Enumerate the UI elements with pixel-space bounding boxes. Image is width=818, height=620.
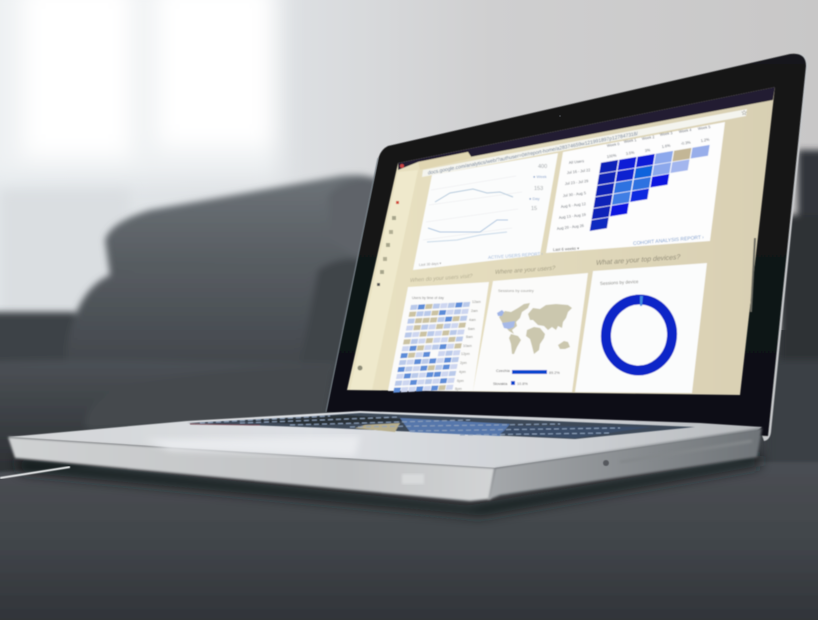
cohort heat grid xyxy=(590,145,710,231)
week headers: -0.3% xyxy=(681,140,692,146)
time of day labels: 12pm xyxy=(461,352,470,356)
background wall and window xyxy=(0,0,818,330)
card: sessions by country map: Sessions by country xyxy=(498,288,534,293)
time of day labels: 2am xyxy=(471,309,478,313)
cohort row labels: Aug 13 - Aug 19 xyxy=(559,213,586,220)
base front face xyxy=(8,437,495,501)
card: users by time of day heatmap: Users by time of day xyxy=(412,296,444,300)
country bar: Slovakia: Slovakia xyxy=(493,382,508,386)
country bar: Slovakia: 10.8% xyxy=(517,382,528,386)
cohort report link: Last 6 weeks ▾ xyxy=(553,246,579,252)
base right side face xyxy=(488,428,762,500)
line: monthly users xyxy=(435,189,513,202)
legend values: 153 xyxy=(534,186,543,192)
time of day labels: 6pm xyxy=(457,379,464,383)
week headers: Week 5 xyxy=(698,125,711,131)
heading: when do your users visit: When do your users visit? xyxy=(410,273,473,284)
week headers: Week 3 xyxy=(660,131,673,137)
card: sessions by device donut: Sessions by device xyxy=(600,279,639,286)
legend values: 15 xyxy=(531,206,537,212)
cohort row labels: All Users xyxy=(569,159,584,165)
power cable xyxy=(0,467,70,478)
donut chart xyxy=(601,295,677,375)
side vent xyxy=(620,441,752,462)
front label xyxy=(402,474,424,484)
base top surface xyxy=(8,411,762,468)
country bar: Slovakia xyxy=(493,381,528,386)
time of day labels: 10am xyxy=(463,344,472,348)
cohort row labels: Jul 30 - Aug 5 xyxy=(563,191,586,198)
sofa xyxy=(0,150,818,480)
cohort report link xyxy=(553,235,704,252)
cohort row labels: Aug 20 - Aug 26 xyxy=(557,224,584,231)
country bar: Czechia: 89.2% xyxy=(549,371,560,375)
heading: top devices: What are your top devices? xyxy=(596,254,680,267)
cohort row labels: Aug 6 - Aug 12 xyxy=(561,202,586,209)
week headers: Week 1 xyxy=(624,138,637,144)
laptop base xyxy=(8,411,762,501)
address bar: ☆ xyxy=(741,109,747,117)
week headers: Week 4 xyxy=(679,128,692,134)
card: sessions by device donut xyxy=(575,263,707,393)
report link: ACTIVE USERS REPORT › xyxy=(488,251,543,260)
cohort row labels: Jul 16 - Jul 22 xyxy=(567,168,591,175)
week headers xyxy=(607,125,711,159)
headphone jack xyxy=(603,460,609,466)
country bar: Czechia xyxy=(496,369,560,375)
laptop lid xyxy=(326,53,808,441)
address bar xyxy=(422,109,747,177)
legend values: ● Week xyxy=(533,174,547,179)
trackpad reflection xyxy=(145,436,360,456)
time of day labels: 8am xyxy=(466,335,473,339)
laptop shadow xyxy=(15,455,760,516)
legend values: 400 xyxy=(538,164,547,170)
card: cohort analysis table xyxy=(546,122,725,253)
time of day labels: 6am xyxy=(468,327,475,331)
time of day labels: 2pm xyxy=(460,361,467,365)
browser tab bar xyxy=(398,87,775,170)
time of day labels: 8pm xyxy=(455,387,462,391)
world map xyxy=(497,303,572,354)
screen xyxy=(347,87,775,395)
card: active users line chart xyxy=(413,153,558,270)
left lid edge xyxy=(326,158,378,412)
table surface xyxy=(0,462,818,620)
card: users by time of day heatmap xyxy=(388,282,489,393)
keyboard xyxy=(187,413,695,439)
week headers: 1.2% xyxy=(701,138,710,143)
week headers: 1.6% xyxy=(662,144,671,149)
cohort row labels: Jul 23 - Jul 29 xyxy=(565,179,589,186)
card: sessions by country map xyxy=(473,273,588,392)
time of day labels: 4am xyxy=(469,318,476,322)
heading: where are your users: Where are your users? xyxy=(495,266,556,276)
week headers: 3.5% xyxy=(626,151,635,156)
line: weekly users xyxy=(428,220,508,232)
card: active users line chart: Last 30 days ▾ xyxy=(419,261,441,267)
time of day labels xyxy=(455,300,481,391)
country bar: Czechia: Czechia xyxy=(496,369,511,373)
week headers: 3% xyxy=(645,148,651,153)
cohort row labels xyxy=(557,159,591,231)
webcam xyxy=(559,115,561,117)
week headers: Week 2 xyxy=(642,135,655,141)
time of day labels: 4pm xyxy=(459,370,466,374)
week headers: Week 0 xyxy=(607,142,620,148)
left sidebar xyxy=(350,170,418,390)
page scrollbar xyxy=(751,238,755,312)
address bar: docs.google.com/analytics/web/?authuser=0#/report-home/a28374659w121991897p127847318/ xyxy=(428,131,639,176)
cohort report link: COHORT ANALYSIS REPORT › xyxy=(633,235,704,247)
week headers: 100% xyxy=(607,153,617,159)
screen background xyxy=(347,87,775,395)
legend values: ● Day xyxy=(529,196,540,201)
line: daily users xyxy=(427,232,507,242)
legend values xyxy=(529,164,547,212)
heatmap grid xyxy=(393,302,470,393)
time of day labels: 12am xyxy=(472,300,481,304)
